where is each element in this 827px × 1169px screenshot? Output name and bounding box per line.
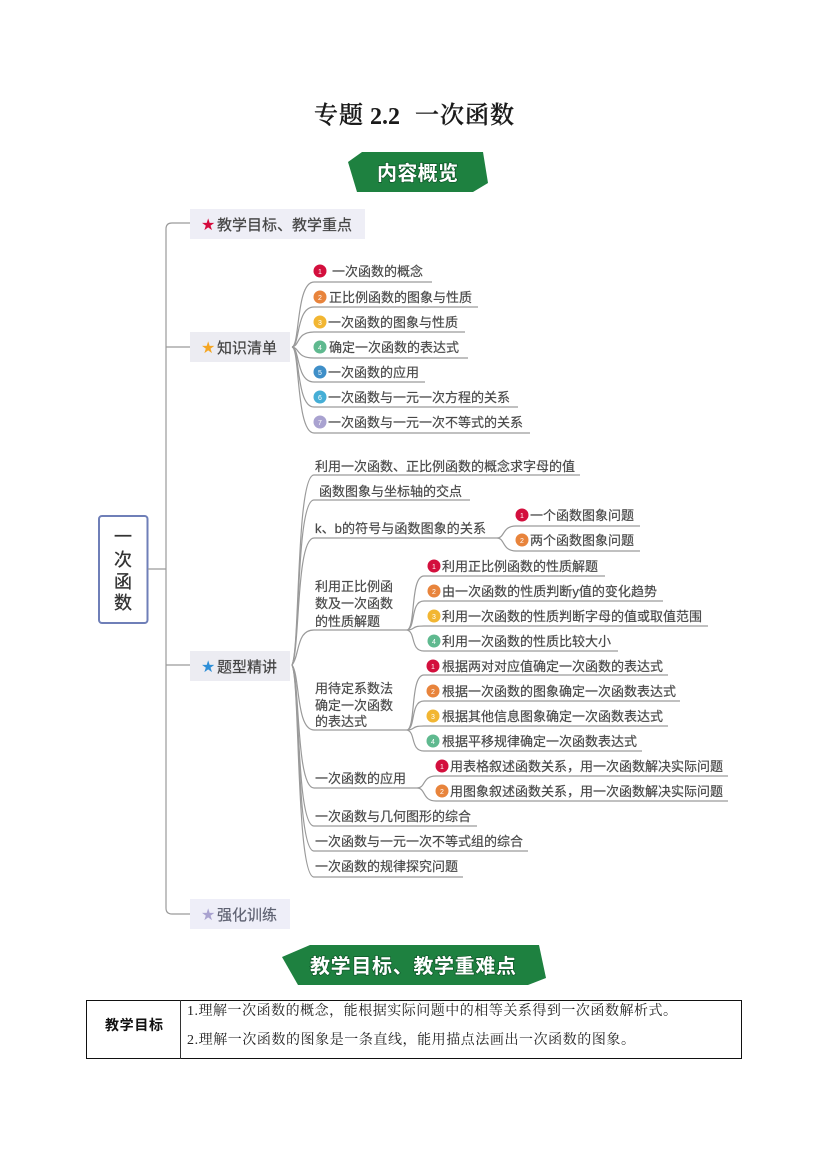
leaf: single graph: 1	[520, 513, 524, 520]
leaf: axis intersections: 函数图象与坐标轴的交点	[319, 484, 462, 499]
leaf: knowledge 2: 2	[318, 295, 322, 302]
leaf: patterns: 一次函数的规律探究问题	[315, 859, 458, 874]
leaf: method 2: 2	[431, 689, 435, 696]
objective 2: 2.理解一次函数的图象是一条直线，能用描点法画出一次函数的图象。	[187, 1031, 635, 1048]
leaf: property 3: 3	[432, 614, 436, 621]
leaf: knowledge 5: 一次函数的应用	[328, 365, 419, 380]
node: teaching objectives	[190, 209, 365, 239]
leaf: knowledge 3: 3	[318, 320, 322, 327]
node: teaching objectives: 教学目标、教学重点	[217, 217, 352, 234]
leaf: undetermined coefficients label: 用待定系数法	[315, 681, 393, 696]
leaf: knowledge 1: 一次函数的概念	[332, 264, 423, 279]
leaf: method 1: 1	[431, 664, 435, 671]
leaf: inequality system: 一次函数与一元一次不等式组的综合	[315, 834, 523, 849]
leaf: properties group label: 数及一次函数	[315, 596, 393, 611]
central topic box: 函	[114, 572, 132, 592]
leaf: knowledge 3: 一次函数的图象与性质	[328, 315, 458, 330]
question type connectors	[292, 475, 728, 877]
banner: content overview: 内容概览	[377, 161, 458, 185]
node: knowledge list: 知识清单	[217, 340, 277, 357]
leaf: property 4: 利用一次函数的性质比较大小	[442, 634, 611, 649]
leaf: two graphs: 2	[520, 538, 524, 545]
table: teaching objectives	[86, 1000, 742, 1059]
node: question types: ★	[201, 657, 215, 676]
knowledge list connectors	[292, 282, 530, 433]
leaf: application 2: 用图象叙述函数关系，用一次函数解决实际问题	[450, 784, 723, 799]
leaf: geometry: 一次函数与几何图形的综合	[315, 809, 471, 824]
leaf: knowledge 7: 7	[318, 420, 322, 427]
central topic box: 次	[114, 550, 132, 570]
banner: teaching objectives and key points	[282, 945, 546, 985]
leaf: knowledge 7: 一次函数与一元一次不等式的关系	[328, 415, 523, 430]
leaf: property 1: 1	[432, 564, 436, 571]
leaf: method 3: 根据其他信息图象确定一次函数表达式	[442, 709, 663, 724]
node: question types	[190, 651, 290, 681]
objective 1: 1.理解一次函数的概念，能根据实际问题中的相等关系得到一次函数解析式。	[187, 1002, 677, 1019]
leaf: knowledge 1: 1	[318, 269, 322, 276]
leaf: undetermined coefficients label	[315, 681, 393, 729]
leaf: properties group label: 利用正比例函	[315, 579, 393, 594]
leaf: property 4: 4	[432, 639, 436, 646]
leaf: undetermined coefficients label: 的表达式	[315, 714, 367, 729]
node: question types: 题型精讲	[217, 659, 277, 676]
leaf: properties group label: 的性质解题	[315, 614, 380, 629]
leaf: knowledge 5: 5	[318, 370, 322, 377]
leaf: method 4: 根据平移规律确定一次函数表达式	[442, 734, 637, 749]
node: reinforcement training: 强化训练	[217, 907, 277, 924]
title	[314, 102, 514, 130]
title: 一次函数	[415, 102, 514, 129]
leaf: application 2: 2	[440, 789, 444, 796]
title: 2.2	[370, 104, 400, 130]
leaf: undetermined coefficients label: 确定一次函数	[315, 698, 393, 713]
mind map	[99, 209, 728, 929]
node: reinforcement training: ★	[201, 905, 215, 924]
leaf: knowledge 4: 确定一次函数的表达式	[329, 340, 459, 355]
leaf: property 2: 由一次函数的性质判断y值的变化趋势	[442, 584, 657, 599]
node: knowledge list: ★	[201, 338, 215, 357]
leaf: two graphs: 两个函数图象问题	[530, 533, 634, 548]
leaf: knowledge 6: 6	[318, 395, 322, 402]
node: teaching objectives: ★	[201, 215, 215, 234]
leaf: applications label: 一次函数的应用	[315, 771, 406, 786]
central topic box	[99, 516, 148, 623]
node: knowledge list	[190, 332, 290, 362]
leaf: method 1: 根据两对对应值确定一次函数的表达式	[442, 659, 663, 674]
central topic box: 数	[114, 593, 132, 613]
leaf: knowledge 6: 一次函数与一元一次方程的关系	[328, 390, 510, 405]
banner: content overview	[348, 152, 488, 192]
leaf: letter values: 利用一次函数、正比例函数的概念求字母的值	[315, 459, 575, 474]
leaf: signs of k and b: k、b的符号与函数图象的关系	[315, 521, 486, 536]
table row header: 教学目标	[105, 1017, 163, 1033]
leaf: method 3: 3	[431, 714, 435, 721]
leaf: method 4: 4	[431, 739, 435, 746]
leaf: properties group label	[315, 579, 393, 629]
title: 专题	[314, 102, 363, 129]
leaf: application 1: 1	[440, 764, 444, 771]
central topic box: 一	[114, 527, 132, 547]
leaf: single graph: 一个函数图象问题	[530, 508, 634, 523]
leaf: property 2: 2	[432, 589, 436, 596]
leaf: property 1: 利用正比例函数的性质解题	[442, 559, 598, 574]
leaf: method 2: 根据一次函数的图象确定一次函数表达式	[442, 684, 676, 699]
main connector trunk	[148, 223, 190, 914]
banner: teaching objectives and key points: 教学目标、教学重难点	[310, 955, 516, 978]
leaf: knowledge 2: 正比例函数的图象与性质	[329, 290, 472, 305]
node: reinforcement training	[190, 899, 290, 929]
leaf: property 3: 利用一次函数的性质判断字母的值或取值范围	[442, 609, 702, 624]
leaf: knowledge 4: 4	[318, 345, 322, 352]
leaf: application 1: 用表格叙述函数关系，用一次函数解决实际问题	[450, 759, 723, 774]
